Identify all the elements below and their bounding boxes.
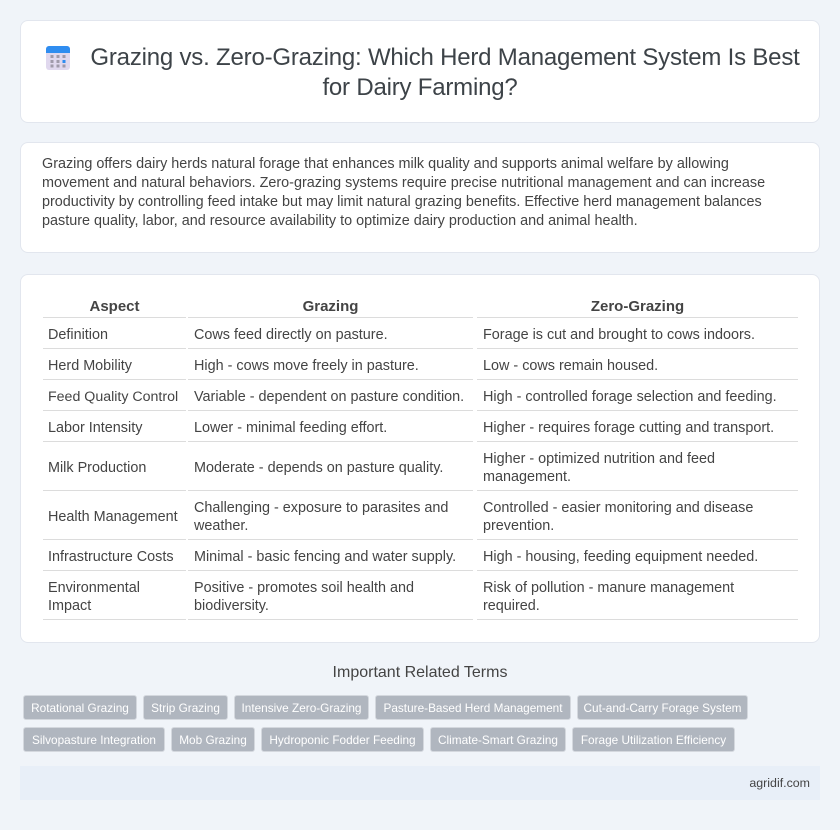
tag: Cut-and-Carry Forage System <box>584 701 742 715</box>
title: Grazing vs. Zero-Grazing: Which Herd Management System Is Best <box>90 44 800 71</box>
panel: title header <box>20 20 820 123</box>
text block: introduction paragraph: productivity by controlling feed intake but may limit natural grazing benefits. Effective herd management balances <box>42 194 762 210</box>
row: Labor Intensity <box>48 420 774 436</box>
tag <box>143 695 228 720</box>
text block: introduction paragraph: Grazing offers dairy herds natural forage that enhances milk quality and supports animal welfare by allowing <box>42 156 729 172</box>
row: Definition: Definition <box>48 327 108 343</box>
tag: Hydroponic Fodder Feeding <box>269 733 416 747</box>
row: Infrastructure Costs: Minimal - basic fencing and water supply. <box>194 549 456 565</box>
row: Milk Production: management. <box>483 469 571 485</box>
text block: introduction paragraph: movement and natural behaviors. Zero-grazing systems require precise nutritional management and can increase <box>42 175 765 191</box>
tag <box>171 727 255 752</box>
row: Feed Quality Control: Feed Quality Control <box>48 389 178 405</box>
row: Health Management: Challenging - exposure to parasites and <box>194 500 448 516</box>
row: Environmental Impact: Impact <box>48 598 91 614</box>
row: Milk Production: Higher - optimized nutrition and feed <box>483 451 715 467</box>
row: Environmental Impact: Positive - promotes soil health and <box>194 580 414 596</box>
footer bar <box>20 766 820 800</box>
row: Feed Quality Control: High - controlled forage selection and feeding. <box>483 389 777 405</box>
row: Infrastructure Costs <box>48 549 758 565</box>
row: Herd Mobility: Herd Mobility <box>48 358 132 374</box>
row: Definition: Forage is cut and brought to cows indoors. <box>483 327 755 343</box>
tag <box>375 695 571 720</box>
icon: calendar <box>46 46 70 70</box>
tag: Forage Utilization Efficiency <box>581 733 726 747</box>
related terms tags <box>23 695 748 752</box>
tag <box>261 727 424 752</box>
tag <box>234 695 369 720</box>
row: Definition <box>48 327 755 343</box>
tag: Climate-Smart Grazing <box>438 733 558 747</box>
tag <box>23 695 137 720</box>
row: Labor Intensity: Labor Intensity <box>48 420 142 436</box>
tag <box>23 727 165 752</box>
tag <box>577 695 748 720</box>
row: Herd Mobility: Low - cows remain housed. <box>483 358 658 374</box>
row: Definition: Cows feed directly on pasture. <box>194 327 388 343</box>
row: Environmental Impact: biodiversity. <box>194 598 269 614</box>
row: Herd Mobility <box>48 358 658 374</box>
row: Milk Production: Moderate - depends on pasture quality. <box>194 460 443 476</box>
panel: comparison table <box>20 274 820 643</box>
tag: Silvopasture Integration <box>32 733 156 747</box>
title: for Dairy Farming? <box>322 74 518 101</box>
table header <box>89 298 684 315</box>
tag: Strip Grazing <box>151 701 220 715</box>
tag <box>430 727 566 752</box>
heading: related terms: Important Related Terms <box>333 664 507 681</box>
panel: introduction <box>20 142 820 253</box>
row: Health Management: prevention. <box>483 518 554 534</box>
row: Environmental Impact: required. <box>483 598 540 614</box>
row: Health Management: Health Management <box>48 509 178 525</box>
row: Milk Production: Milk Production <box>48 460 146 476</box>
title <box>90 44 800 101</box>
footer text: agridif.com <box>749 776 810 790</box>
table header: Zero-Grazing <box>591 298 684 315</box>
row: Infrastructure Costs: High - housing, feeding equipment needed. <box>483 549 758 565</box>
text block: introduction paragraph <box>42 156 765 229</box>
tag: Intensive Zero-Grazing <box>242 701 362 715</box>
text block: introduction paragraph: pasture quality, labor, and resource availability to optimize dairy production and animal health. <box>42 213 638 229</box>
row: Feed Quality Control: Variable - dependent on pasture condition. <box>194 389 464 405</box>
row: Environmental Impact: Environmental <box>48 580 140 596</box>
tag <box>572 727 735 752</box>
table header: Grazing <box>303 298 358 315</box>
row: Feed Quality Control <box>48 389 777 405</box>
tag: Pasture-Based Herd Management <box>383 701 562 715</box>
table header: Aspect <box>89 298 140 315</box>
tag: Rotational Grazing <box>31 701 129 715</box>
row: Milk Production <box>48 451 715 485</box>
row: Environmental Impact: Risk of pollution - manure management <box>483 580 734 596</box>
row: Health Management <box>48 500 753 534</box>
row: Labor Intensity: Higher - requires forage cutting and transport. <box>483 420 774 436</box>
tag: Mob Grazing <box>179 733 247 747</box>
row: Environmental Impact <box>48 580 734 614</box>
row: Health Management: Controlled - easier monitoring and disease <box>483 500 753 516</box>
row: Health Management: weather. <box>194 518 248 534</box>
row: Labor Intensity: Lower - minimal feeding effort. <box>194 420 387 436</box>
row: Herd Mobility: High - cows move freely in pasture. <box>194 358 419 374</box>
row: Infrastructure Costs: Infrastructure Costs <box>48 549 174 565</box>
